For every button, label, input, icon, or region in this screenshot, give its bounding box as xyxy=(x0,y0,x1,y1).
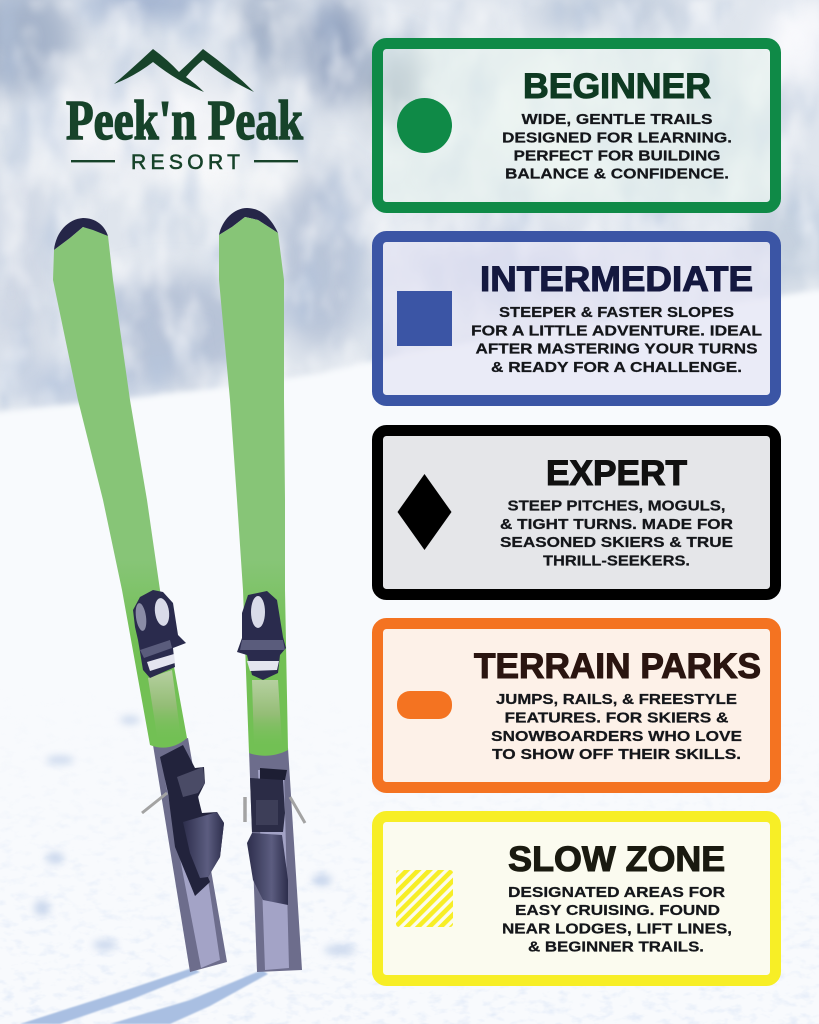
description: STEEP PITCHES, MOGULS, xyxy=(508,498,726,514)
icon: green circle xyxy=(397,98,452,153)
heading: SLOW ZONE xyxy=(508,840,725,879)
description: FEATURES. FOR SKIERS & xyxy=(504,710,729,726)
icon: yellow striped square xyxy=(396,870,453,927)
panel: expert xyxy=(378,430,776,594)
ski tip xyxy=(54,218,108,250)
mid-ski fade xyxy=(252,680,282,749)
description: PERFECT FOR BUILDING xyxy=(514,148,720,164)
rear binding xyxy=(245,768,305,905)
logo wordmark: Peek'n Peak xyxy=(66,89,304,151)
description: WIDE, GENTLE TRAILS xyxy=(522,111,712,128)
description xyxy=(502,884,732,956)
description: TO SHOW OFF THEIR SKILLS. xyxy=(492,746,741,763)
green ski body xyxy=(53,227,187,748)
left ski xyxy=(53,218,227,972)
description: FOR A LITTLE ADVENTURE. IDEAL xyxy=(471,322,762,340)
heading: INTERMEDIATE xyxy=(480,260,753,299)
description: THRILL-SEEKERS. xyxy=(543,552,690,570)
description: STEEPER & FASTER SLOPES xyxy=(499,304,734,321)
description: & BEGINNER TRAILS. xyxy=(528,938,704,956)
description: BALANCE & CONFIDENCE. xyxy=(505,166,729,183)
rear binding xyxy=(142,745,224,896)
description: & READY FOR A CHALLENGE. xyxy=(491,359,742,376)
right ski xyxy=(219,208,305,972)
heading: EXPERT xyxy=(546,454,687,493)
panel: slow zone xyxy=(378,816,776,980)
description: DESIGNED FOR LEARNING. xyxy=(502,130,732,146)
mid-ski fade xyxy=(148,670,181,742)
description: JUMPS, RAILS, & FREESTYLE xyxy=(496,691,737,708)
description: & TIGHT TURNS. MADE FOR xyxy=(500,516,733,533)
heading: TERRAIN PARKS xyxy=(474,647,761,686)
logo subtitle: RESORT xyxy=(131,151,240,174)
description: DESIGNATED AREAS FOR xyxy=(508,884,725,901)
front binding xyxy=(133,590,186,678)
description: SNOWBOARDERS WHO LOVE xyxy=(491,728,742,745)
panel: intermediate xyxy=(378,236,776,400)
snow field xyxy=(0,290,819,1024)
icon: orange pill xyxy=(397,691,452,719)
lower steel section xyxy=(249,748,302,972)
description xyxy=(500,498,733,570)
icon: black diamond xyxy=(398,474,452,550)
logo: Peek'n Peak Resort xyxy=(66,49,304,174)
icon: mountain peaks xyxy=(114,49,254,92)
description: EASY CRUISING. FOUND xyxy=(515,902,720,919)
description xyxy=(471,304,762,376)
panel: beginner xyxy=(378,44,776,208)
description: AFTER MASTERING YOUR TURNS xyxy=(476,340,758,358)
front binding xyxy=(237,591,286,680)
description: NEAR LODGES, LIFT LINES, xyxy=(502,920,732,938)
green ski body xyxy=(219,217,288,756)
icon: blue square xyxy=(397,291,452,346)
heading: BEGINNER xyxy=(523,67,711,106)
description xyxy=(502,111,732,183)
description: SEASONED SKIERS & TRUE xyxy=(500,534,733,551)
description xyxy=(491,691,742,763)
ski shadows on snow xyxy=(20,968,268,1024)
ski tip xyxy=(219,208,278,235)
panel: terrain parks xyxy=(378,624,776,788)
lower steel section xyxy=(153,738,227,972)
